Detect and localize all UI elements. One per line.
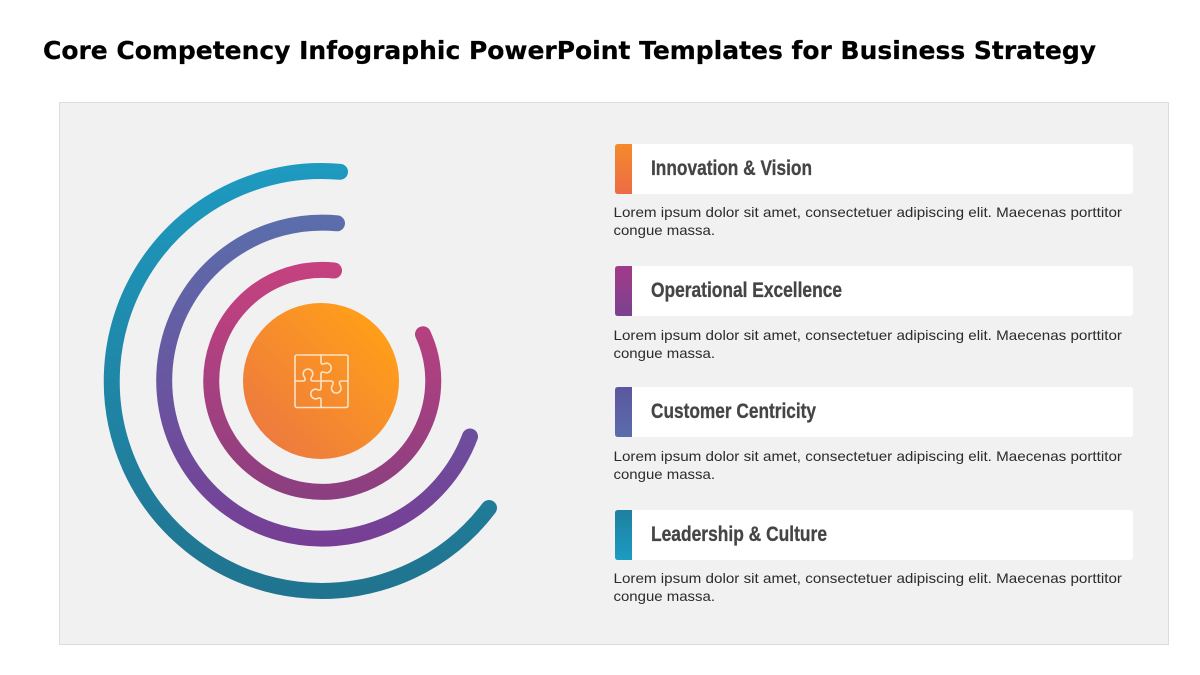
item: Customer Centricity [614,387,1133,482]
body text: Lorem ipsum dolor sit amet, consectetuer adipiscing elit. Maecenas porttitor [614,327,1122,343]
body text: Lorem ipsum dolor sit amet, consectetuer adipiscing elit. Maecenas porttitor [614,570,1122,586]
heading: Customer Centricity [651,400,816,423]
body text: congue massa. [614,588,715,604]
item: Leadership & Culture [614,510,1133,604]
body text [614,327,1122,361]
card background [620,266,1133,316]
middle ring [164,223,470,539]
accent tab [615,266,632,316]
heading: Leadership & Culture [651,523,827,546]
item: Operational Excellence [614,266,1133,361]
inner ring [211,270,433,492]
card background [620,510,1133,560]
body text: congue massa. [614,222,715,238]
heading: Innovation & Vision [651,157,812,180]
core circle [243,303,399,459]
panel: background [60,102,1168,644]
accent tab [615,144,632,194]
body text [614,448,1122,482]
card background [620,144,1133,194]
body text: congue massa. [614,345,715,361]
body text [614,570,1122,604]
accent tab [615,387,632,437]
body text: congue massa. [614,466,715,482]
title: Core Competency Infographic PowerPoint Templates for Business Strategy [43,36,1096,65]
body text: Lorem ipsum dolor sit amet, consectetuer adipiscing elit. Maecenas porttitor [614,448,1122,464]
heading: Operational Excellence [651,279,842,302]
body text: Lorem ipsum dolor sit amet, consectetuer adipiscing elit. Maecenas porttitor [614,204,1122,220]
accent tab [615,510,632,560]
body text [614,204,1122,238]
item: Innovation & Vision [614,144,1133,238]
icon: puzzle [295,355,348,408]
chart: concentric rings [112,171,489,591]
card background [620,387,1133,437]
outer ring [112,171,489,591]
